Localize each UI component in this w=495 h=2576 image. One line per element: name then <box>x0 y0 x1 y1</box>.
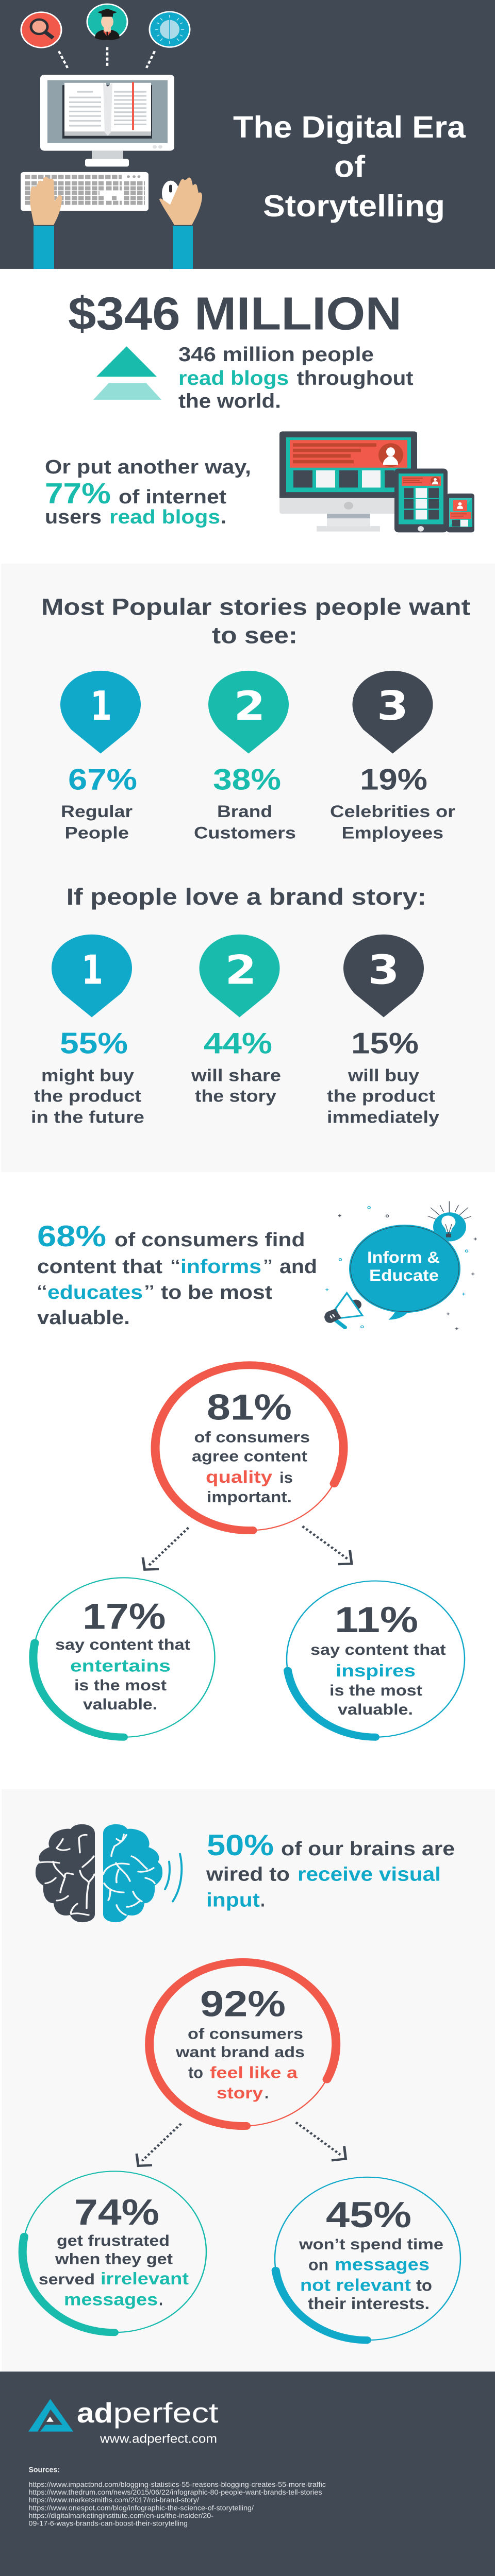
text block: 68 percent informs and educates <box>37 1220 317 1328</box>
ring: 17 percent entertains: entertains <box>70 1656 171 1675</box>
stat: 38 percent brand customers: Customers <box>194 823 296 842</box>
icon: layered triangle <box>93 346 161 400</box>
icon: speech bubble with lightbulb and megaphone: Inform & <box>367 1248 440 1266</box>
text block: 68 percent informs and educates: “ <box>37 1281 47 1303</box>
icon: magnifier badge <box>21 12 61 47</box>
text block: 77 percent of internet users: . <box>221 505 226 528</box>
text block: 68 percent informs and educates: valuable. <box>37 1306 130 1328</box>
ring: 74 percent frustrated: messages <box>64 2290 158 2309</box>
ring: 74 percent frustrated: when they get <box>55 2250 173 2267</box>
arrow: from 92 percent to 45 percent <box>296 2123 345 2160</box>
text block: 68 percent informs and educates: “ <box>171 1255 180 1277</box>
icon: desktop monitor with open book <box>40 75 174 166</box>
stat: 55 percent might buy: in the future <box>31 1107 144 1127</box>
stat: 44 percent will share <box>191 1027 281 1106</box>
stat: 55 percent might buy <box>31 1027 144 1127</box>
pin: first outcome <box>52 935 132 1018</box>
heading: most popular stories <box>41 594 470 649</box>
ring: 45 percent not relevant <box>275 2177 460 2340</box>
title: The Digital Era <box>233 110 466 144</box>
pin: number 1: 1 <box>90 683 112 730</box>
pin: number 3: 3 <box>377 683 408 730</box>
icon: two-tone brain <box>36 1824 182 1922</box>
ring: 11 percent inspires: 11% <box>335 1599 418 1640</box>
pin: third outcome: 3 <box>368 947 400 993</box>
ring: 92 percent feel like a story: to <box>188 2063 203 2082</box>
ring: 17 percent entertains: is the most <box>74 1676 167 1694</box>
panel: blog readership <box>45 288 474 532</box>
ring: 45 percent not relevant: to <box>416 2276 432 2295</box>
ring: 81 percent content quality: 81% <box>207 1387 292 1428</box>
stat: 15 percent will buy: 15% <box>351 1027 419 1060</box>
ring: 81 percent content quality: of consumers <box>194 1429 310 1446</box>
ring: 81 percent content quality <box>155 1365 343 1531</box>
stat: 38 percent brand customers <box>194 763 296 842</box>
text block: 346 million people read blogs: throughout <box>296 367 414 389</box>
ring: 81 percent content quality: quality <box>206 1467 272 1486</box>
text block: 68 percent informs and educates: ” <box>263 1255 272 1277</box>
pin: number 2: 2 <box>234 683 266 730</box>
stat: 15 percent will buy <box>327 1027 439 1127</box>
ring: 81 percent content quality: is <box>279 1469 293 1486</box>
stat: 19 percent celebrities or employees: Employees <box>341 823 443 842</box>
ring: 45 percent not relevant: won’t spend time <box>299 2235 443 2253</box>
text block: 346 million people read blogs: 346 million people <box>178 344 374 366</box>
stat: 38 percent brand customers: Brand <box>217 802 272 821</box>
ring: 92 percent feel like a story: . <box>265 2084 269 2102</box>
text block: 50 percent of brains: of our brains are <box>281 1838 455 1859</box>
stat: 44 percent will share: 44% <box>204 1027 272 1060</box>
text block: sources: https://digitalmarketinginstitute.com/en-us/the-insider/20- <box>29 2512 213 2520</box>
text block: 50 percent of brains <box>206 1829 455 1911</box>
logo: adperfect <box>28 2398 219 2446</box>
ring: 74 percent frustrated: 74% <box>74 2192 159 2232</box>
ring: 45 percent not relevant: their interests. <box>308 2295 430 2313</box>
logo: adperfect: www.adperfect.com <box>100 2432 217 2446</box>
ring: 74 percent frustrated: get frustrated <box>57 2232 170 2249</box>
text block: 68 percent informs and educates: of consumers find <box>114 1229 305 1251</box>
stat: 44 percent will share: will share <box>191 1066 281 1085</box>
text block: 68 percent informs and educates: informs <box>180 1255 261 1277</box>
ring: 17 percent entertains: valuable. <box>83 1696 157 1713</box>
stat: 44 percent will share: the story <box>195 1087 276 1106</box>
heading: most popular stories: Most Popular stories people want <box>41 594 470 620</box>
text block: 68 percent informs and educates: educates <box>47 1281 143 1303</box>
ring: 74 percent frustrated: . <box>159 2290 163 2309</box>
stat: 67 percent regular people: Regular <box>61 802 133 821</box>
text block: 68 percent informs and educates: ” <box>144 1281 154 1303</box>
text block: 77 percent of internet users: 77% <box>45 477 111 510</box>
ring: 81 percent content quality: important. <box>207 1488 292 1505</box>
ring: 92 percent feel like a story: feel like a <box>210 2063 298 2082</box>
stat: 55 percent might buy: 55% <box>60 1027 128 1060</box>
text block: 68 percent informs and educates: content that <box>37 1255 162 1277</box>
ring: 92 percent feel like a story <box>149 1962 336 2126</box>
pin: number 2 <box>208 671 289 754</box>
stat: 15 percent will buy: the product <box>327 1087 435 1106</box>
ring: 81 percent content quality: agree content <box>192 1447 307 1465</box>
ring: 92 percent feel like a story: 92% <box>200 1984 286 2024</box>
panel: footer <box>0 2371 495 2576</box>
ring: 74 percent frustrated <box>23 2171 206 2332</box>
arrow: from 92 percent to 74 percent <box>137 2124 181 2166</box>
stat: 67 percent regular people: People <box>65 823 129 842</box>
ring: 45 percent not relevant: messages <box>335 2255 430 2274</box>
stat: 15 percent will buy: will buy <box>348 1066 419 1085</box>
heading: 346 million: $346 MILLION <box>68 288 402 340</box>
text block: 77 percent of internet users <box>45 456 251 528</box>
text block: 50 percent of brains: wired to <box>206 1863 290 1885</box>
ring: 74 percent frustrated: irrelevant <box>101 2269 189 2289</box>
text block: sources <box>29 2466 326 2528</box>
text block: 346 million people read blogs <box>178 344 414 412</box>
title <box>233 110 466 223</box>
logo: adperfect: ad <box>77 2398 113 2429</box>
ring: 11 percent inspires: say content that <box>310 1641 446 1658</box>
stat: 55 percent might buy: might buy <box>41 1066 134 1085</box>
ring: 45 percent not relevant: 45% <box>326 2194 411 2235</box>
arrow: from 81 percent to 17 percent <box>143 1528 189 1570</box>
ring: 92 percent feel like a story: want brand ads <box>175 2043 305 2061</box>
pin: number 1 <box>60 671 141 754</box>
ring: 17 percent entertains <box>33 1578 214 1737</box>
pin: second outcome: 2 <box>225 947 257 993</box>
panel: content value <box>33 1201 477 1737</box>
pin: first outcome: 1 <box>81 947 103 993</box>
pin: second outcome <box>199 935 279 1018</box>
stat: 15 percent will buy: immediately <box>327 1107 439 1127</box>
heading: most popular stories: to see: <box>212 623 298 649</box>
stat: 19 percent celebrities or employees: Celebrities or <box>330 802 455 821</box>
logo: adperfect: perfect <box>113 2398 218 2429</box>
stat: 55 percent might buy: the product <box>34 1087 141 1106</box>
icon: keyboard <box>21 172 148 211</box>
text block: 77 percent of internet users: read blogs <box>109 505 220 528</box>
text block: sources: 09-17-6-ways-brands-can-boost-their-storytelling <box>29 2520 188 2528</box>
ring: 92 percent feel like a story: story <box>217 2084 263 2102</box>
stat: 67 percent regular people: 67% <box>68 763 137 796</box>
panel: popular stories <box>1 564 495 1172</box>
heading: if people love a brand story: If people love a brand story: <box>67 884 426 910</box>
ring: 11 percent inspires: valuable. <box>338 1701 413 1718</box>
text block: 50 percent of brains: 50% <box>207 1829 274 1861</box>
icon: desktop, tablet and phone <box>279 431 474 532</box>
text block: sources: https://www.onespot.com/blog/infographic-the-science-of-storytelling/ <box>29 2504 254 2512</box>
ring: 17 percent entertains: say content that <box>55 1636 190 1653</box>
title: of <box>334 149 366 184</box>
stat: 38 percent brand customers: 38% <box>213 763 281 796</box>
text block: sources: https://www.thedrum.com/news/2015/06/22/infographic-80-people-want-brands-tell-stories <box>29 2488 322 2497</box>
ring: 45 percent not relevant: not relevant <box>300 2276 411 2295</box>
stat: 19 percent celebrities or employees <box>330 763 455 842</box>
text block: 68 percent informs and educates: to be most <box>161 1281 272 1303</box>
text block: 68 percent informs and educates: 68% <box>37 1220 106 1252</box>
pin: number 3 <box>353 671 433 754</box>
icon: dashed connector lines <box>59 47 155 68</box>
text block: 346 million people read blogs: read blogs <box>178 367 289 389</box>
icon: mouse <box>162 181 179 206</box>
text block: 50 percent of brains: input <box>206 1889 260 1911</box>
icon: speech bubble with lightbulb and megaphone <box>324 1201 477 1330</box>
ring: 45 percent not relevant: on <box>308 2256 328 2274</box>
text block: sources: Sources: <box>29 2466 60 2474</box>
icon: right hand and sleeve <box>159 177 202 269</box>
text block: 50 percent of brains: . <box>260 1889 265 1911</box>
text block: 68 percent informs and educates: and <box>279 1255 317 1277</box>
ring: 74 percent frustrated: served <box>39 2270 95 2288</box>
ring: 11 percent inspires: inspires <box>336 1661 416 1680</box>
panel: hero header <box>0 0 495 269</box>
text block: 346 million people read blogs: the world. <box>178 390 281 412</box>
ring: 11 percent inspires: is the most <box>329 1682 422 1699</box>
pin: third outcome <box>343 935 424 1018</box>
arrow: from 81 percent to 11 percent <box>303 1527 352 1564</box>
text block: 77 percent of internet users: of internet <box>119 486 226 508</box>
text block: sources: https://www.impactbnd.com/blogging-statistics-55-reasons-blogging-creates-55-more-traffic <box>29 2481 326 2489</box>
text block: 77 percent of internet users: users <box>45 505 102 528</box>
icon: graduate badge <box>87 4 127 40</box>
ring: 92 percent feel like a story: of consumers <box>188 2025 303 2042</box>
ring: 11 percent inspires <box>287 1581 465 1737</box>
ring: 17 percent entertains: 17% <box>82 1596 166 1637</box>
text block: 50 percent of brains: receive visual <box>298 1863 441 1885</box>
icon: speech bubble with lightbulb and megaphone: Educate <box>369 1266 439 1284</box>
icon: brain badge <box>150 12 190 47</box>
icon: left hand and sleeve <box>30 177 62 269</box>
title: Storytelling <box>263 189 445 223</box>
text block: 77 percent of internet users: Or put another way, <box>45 456 251 478</box>
stat: 19 percent celebrities or employees: 19% <box>360 763 427 796</box>
stat: 67 percent regular people <box>61 763 137 842</box>
panel: visual input and brand ads <box>2 1789 495 2372</box>
text block: sources: https://www.marketsmiths.com/2017/roi-brand-story/ <box>29 2496 200 2504</box>
